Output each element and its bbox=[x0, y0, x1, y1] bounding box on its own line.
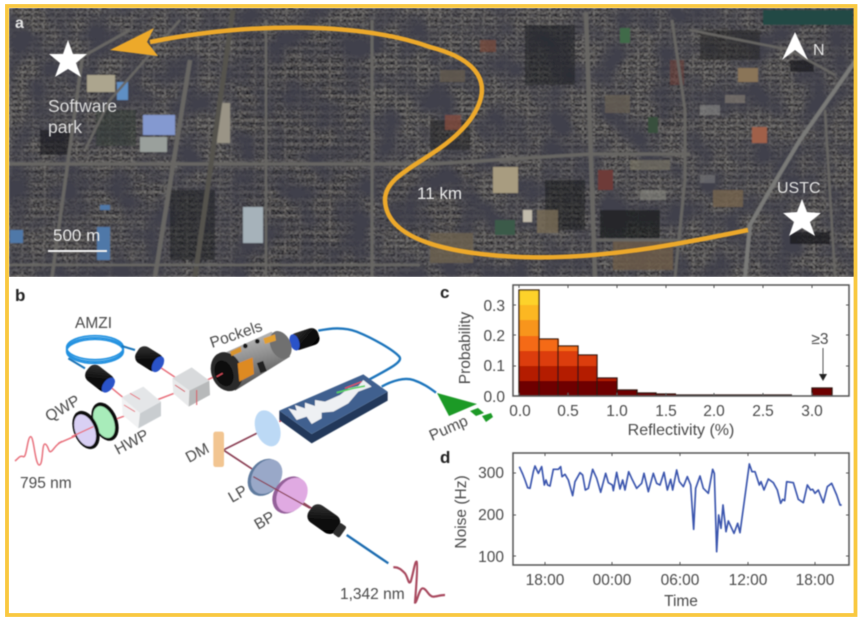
icon: lens bbox=[250, 407, 285, 450]
icon: beam splitter cube left bbox=[122, 387, 161, 428]
scale bar: 500 m bbox=[48, 226, 107, 252]
axes bbox=[513, 453, 849, 565]
icon: bottom fibre bbox=[347, 535, 388, 563]
icon: collimator lower bbox=[82, 362, 118, 396]
panel b: optical setup bbox=[15, 286, 493, 603]
x tick labels: 00:00 bbox=[593, 572, 632, 589]
x tick labels: 0.0 bbox=[509, 403, 531, 420]
x tick labels: 12:00 bbox=[729, 572, 768, 589]
y tick labels: 300 bbox=[478, 465, 504, 482]
callout: at least 3: ≥3 bbox=[811, 331, 829, 348]
panel a: satellite map bbox=[9, 8, 856, 277]
label: QWP: QWP bbox=[42, 392, 83, 425]
icon: beam splitter cube right bbox=[172, 367, 210, 407]
icon: quarter-wave plate bbox=[67, 407, 105, 453]
x tick labels: 2.5 bbox=[752, 403, 774, 420]
optical beams bbox=[58, 365, 293, 443]
x axis title: Time bbox=[664, 593, 698, 610]
north arrow: N bbox=[813, 42, 825, 59]
label: b: b bbox=[15, 286, 25, 305]
icon: output fibres bbox=[318, 328, 436, 393]
icon: half-wave plate bbox=[86, 399, 124, 445]
y tick labels: 100 bbox=[478, 549, 504, 566]
label: DM: DM bbox=[183, 440, 212, 467]
icon: lithium niobate chip bbox=[279, 374, 388, 443]
histogram bars bbox=[519, 290, 832, 396]
x tick labels bbox=[526, 572, 835, 589]
icon: 795 nm wave bbox=[15, 437, 62, 465]
line: noise over time bbox=[519, 464, 842, 552]
icon: pump laser bbox=[437, 393, 493, 422]
label: AMZI: AMZI bbox=[75, 315, 112, 332]
x tick labels: 2.0 bbox=[703, 403, 725, 420]
x axis title: Reflectivity (%) bbox=[628, 422, 734, 439]
panel c: reflectivity histogram bbox=[440, 283, 849, 439]
x tick labels: 18:00 bbox=[796, 572, 835, 589]
y tick labels: 0.1 bbox=[483, 358, 505, 375]
axes bbox=[513, 285, 849, 396]
icon: collimator upper bbox=[132, 343, 167, 375]
label: Software park: Software bbox=[48, 96, 117, 116]
y axis title: Noise (Hz) bbox=[453, 475, 470, 549]
y tick labels: 0.0 bbox=[483, 389, 505, 406]
x tick labels: 0.5 bbox=[557, 403, 579, 420]
label: d: d bbox=[440, 448, 450, 467]
scale bar: 500 m: 500 m bbox=[53, 226, 100, 245]
y tick labels: 0.3 bbox=[483, 298, 505, 315]
x tick labels: 1.5 bbox=[655, 403, 677, 420]
icon: dichroic mirror bbox=[213, 432, 224, 467]
north arrow bbox=[782, 32, 825, 60]
label: 1,342 nm: 1,342 nm bbox=[340, 586, 405, 603]
label: USTC: USTC bbox=[777, 180, 821, 197]
label: 795 nm: 795 nm bbox=[20, 475, 72, 492]
icon: collimator bottom bbox=[304, 501, 349, 541]
route arrow: 11 km bbox=[110, 28, 748, 257]
x tick labels: 18:00 bbox=[526, 572, 565, 589]
y tick labels: 0.2 bbox=[483, 328, 505, 345]
panel d: noise time series bbox=[440, 448, 849, 610]
label: Pump: Pump bbox=[427, 413, 471, 445]
y tick labels bbox=[478, 465, 504, 566]
label: c: c bbox=[440, 283, 449, 302]
label: LP: LP bbox=[226, 482, 250, 506]
icon: 1,342 nm wave bbox=[393, 562, 445, 603]
star: USTC bbox=[783, 199, 821, 236]
icon: AMZI fibre coil bbox=[67, 336, 135, 368]
x tick labels: 1.0 bbox=[606, 403, 628, 420]
icon: band-pass filter bbox=[265, 470, 314, 520]
label: Software park: park bbox=[48, 117, 82, 137]
label: HWP: HWP bbox=[112, 427, 152, 459]
star: Software park bbox=[49, 40, 87, 77]
x tick labels bbox=[509, 403, 823, 420]
x tick labels: 3.0 bbox=[801, 403, 823, 420]
y tick labels bbox=[483, 298, 505, 406]
label: 11 km: 11 km bbox=[417, 184, 462, 203]
label: BP: BP bbox=[252, 508, 278, 533]
y axis title: Probability bbox=[457, 312, 474, 384]
icon: collimator output bbox=[287, 326, 321, 352]
label: Pockels: Pockels bbox=[208, 318, 265, 352]
icon: Pockels cell bbox=[205, 327, 296, 396]
roads bbox=[9, 10, 856, 277]
callout: at least 3 bbox=[811, 331, 829, 381]
label: a: a bbox=[15, 15, 24, 32]
y tick labels: 200 bbox=[478, 507, 504, 524]
icon: long-pass filter bbox=[241, 452, 289, 503]
x tick labels: 06:00 bbox=[661, 572, 700, 589]
